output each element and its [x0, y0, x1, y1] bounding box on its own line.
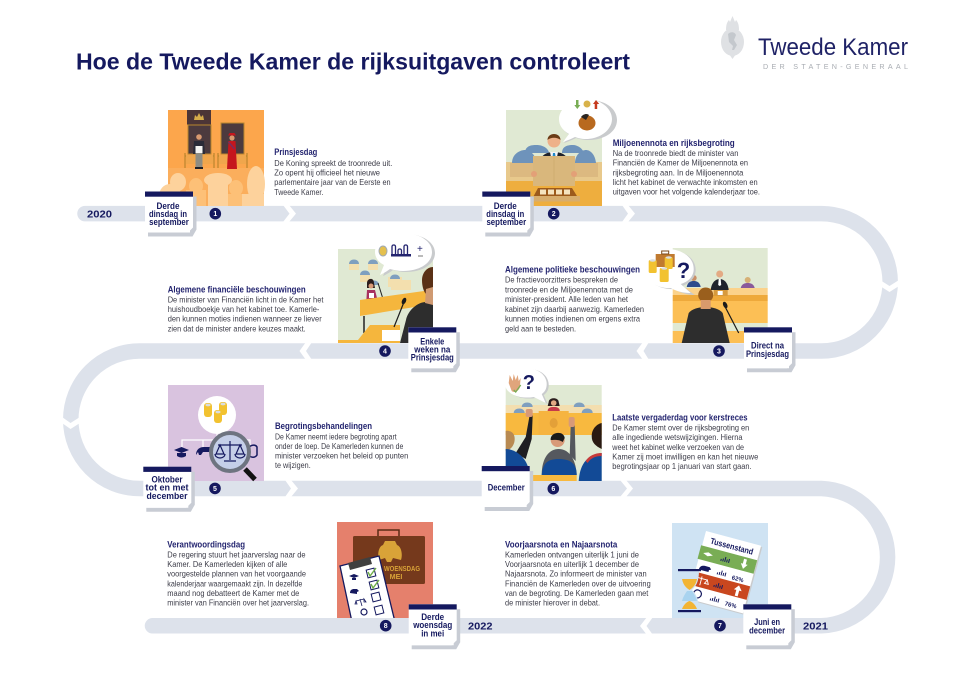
minister-president seen from behind [682, 307, 730, 343]
illustration 4: Algemene financiele beschouwingen [338, 233, 435, 343]
text block 1: De Koning spreekt de troonrede uit. [274, 158, 392, 168]
text block 1: parlementaire jaar van de Eerste en [274, 177, 391, 187]
illustration 5: Begrotingsbehandelingen [168, 385, 264, 481]
step badge 7: 7 [718, 623, 722, 630]
text block 7: van de begroting. De Kamerleden gaan met [505, 588, 649, 598]
speech bubble [559, 99, 617, 143]
king [196, 134, 202, 140]
speech bubble: + [417, 244, 423, 255]
text block 3: geld aan te besteden. [505, 324, 576, 334]
title: Hoe de Tweede Kamer de rijksuitgaven controleert [76, 48, 630, 74]
text block 2 [613, 138, 760, 197]
text block 8: voorgestelde plannen van het voorgaande [167, 569, 306, 579]
text block 1 [274, 147, 392, 197]
step badge 1 [210, 208, 221, 220]
step badge 4: 4 [383, 348, 387, 356]
step badge 3: 3 [717, 348, 721, 356]
text block 3: kabinet zijn daarbij aanwezig. Kamerleden [505, 304, 644, 314]
text block 6: alle ingediende wetswijzigingen. Hierna [612, 432, 743, 442]
date card 3 [744, 327, 796, 372]
icon: jug [249, 445, 257, 457]
text block 2: uitgaven voor het volgende kalenderjaar toe. [613, 187, 760, 197]
date card 2: Derde [494, 201, 517, 211]
text block 6: begrotingsjaar op 1 januari van start gaan. [612, 461, 752, 471]
text block 7: Financiën de Kamerleden over de uitvoering [505, 578, 651, 588]
speech bubble: ? [523, 372, 535, 394]
illustration 8: Verantwoordingsdag: WOENSDAG [384, 564, 420, 573]
step badge 7 [714, 620, 726, 632]
text block 5 [275, 421, 408, 470]
step badge 6: 6 [551, 486, 555, 493]
woman speaker [367, 279, 375, 288]
date card 1 [145, 192, 196, 236]
date card 7: december [749, 626, 786, 636]
date card 1: september [149, 217, 189, 227]
illustration 3: Algemene politieke beschouwingen [644, 248, 768, 343]
text block 2: Na de troonrede biedt de minister van [613, 148, 739, 158]
illustration 8: Verantwoordingsdag [337, 522, 433, 622]
illustration 6: Laatste vergaderdag voor kerstreces [505, 368, 602, 481]
clipboard [340, 556, 395, 622]
briefcase [378, 530, 399, 538]
text block 4: Algemene financiële beschouwingen [168, 284, 306, 294]
illustration 2: Miljoenennota [506, 99, 617, 206]
date card 5 [143, 467, 195, 512]
magnifier [211, 433, 255, 480]
text block 2: Financiën de Kamer de Miljoenennota en [613, 158, 748, 168]
step badge 8: 8 [384, 623, 388, 630]
text block 8 [167, 539, 309, 608]
cabinet members [691, 275, 697, 281]
illustration 7: Voorjaarsnota en Najaarsnota [672, 523, 768, 618]
text block 3: De fractievoorzitters bespreken de [505, 274, 618, 284]
text block 7: de minister hierover in debat. [505, 598, 600, 608]
document: Tussenstand: 62% [731, 575, 745, 584]
text block 3 [505, 265, 644, 334]
step badge 4 [379, 345, 391, 357]
text block 4: De minister van Financiën licht in de Kamer het [168, 294, 324, 304]
icon: cow [196, 447, 215, 455]
text block 7: Voorjaarsnota en Najaarsnota [505, 539, 618, 549]
text block 7 [505, 539, 651, 608]
year 2022: 2022 [468, 620, 493, 632]
lectern ledge [360, 291, 433, 316]
text block 2: rijksbegroting aan. In de Miljoenennota [613, 167, 744, 177]
text block 5: onder de loep. De Kamerleden kunnen de [275, 441, 403, 451]
step badge 3 [713, 345, 725, 357]
text block 1: Zo opent hij officieel het nieuwe [274, 168, 380, 178]
crest panel [187, 110, 211, 124]
step badge 2: 2 [552, 211, 556, 218]
minister [540, 152, 569, 162]
icon: crest [721, 16, 744, 59]
text block 7: Voorjaarsnota en uiterlijk 1 december de [505, 559, 639, 569]
left person [506, 431, 515, 451]
icon: mortar board [174, 447, 189, 458]
date card 5: tot en met [146, 483, 189, 493]
step badge 6 [548, 483, 559, 495]
date card 5: Oktober [152, 475, 183, 485]
text block 6: weet het kabinet welke verzoeken van de [611, 442, 744, 452]
text block 1: Prinsjesdag [274, 147, 317, 157]
middle person [542, 449, 577, 475]
text block 6: Laatste vergaderdag voor kerstreces [612, 412, 748, 422]
microphone [725, 306, 739, 333]
text block 5: Begrotingsbehandelingen [275, 421, 372, 431]
text block 3: troonrede en de Miljoenennota met de [505, 284, 633, 294]
text block 8: De regering stuurt het jaarverslag naar de [167, 549, 306, 559]
date card 4 [408, 327, 460, 372]
thrones [188, 125, 211, 154]
tray [531, 188, 580, 201]
date card 4: Enkele [420, 336, 444, 346]
date card 2: september [486, 217, 527, 227]
step badge 8 [380, 620, 392, 632]
hourglass [678, 569, 701, 612]
text block 3: kunnen moties indienen om ergens extra [505, 314, 640, 324]
logo: Tweede Kamer [721, 16, 908, 71]
date card 8 [409, 604, 460, 649]
text block 8: maand nog debatteert de Kamer met de [167, 588, 299, 598]
date card 2 [482, 192, 534, 236]
step badge 2 [548, 208, 560, 220]
document: Tussenstand: Tussenstand [709, 536, 754, 557]
timeline band [62, 205, 899, 635]
text block 8: Verantwoordingsdag [167, 539, 245, 549]
logo: Tweede Kamer: DER STATEN-GENERAAL [763, 62, 908, 71]
text block 6: Kamer zij moet inwilligen en kan het nieuwe [612, 451, 758, 461]
step badge 1: 1 [213, 211, 217, 218]
document: Tussenstand [680, 529, 763, 615]
foreground man [400, 302, 433, 343]
date card 6: December [488, 482, 525, 492]
illustration 8: Verantwoordingsdag: MEI [390, 572, 402, 581]
text block 7: Najaarsnota. Zo informeert de minister van [505, 569, 647, 579]
date card 1: Derde [156, 201, 180, 211]
speech bubble: ? [677, 258, 690, 283]
text block 4: zien dat de minister andere keuzes maakt. [168, 324, 306, 334]
paper [533, 156, 575, 186]
year 2021: 2021 [803, 620, 828, 632]
text block 4: den kunnen moties indienen wanneer ze liever [168, 314, 322, 324]
desk [539, 411, 569, 435]
date card 3: Direct na [751, 340, 785, 350]
text block 1: Tweede Kamer. [274, 187, 323, 197]
document: Tussenstand: 76% [724, 601, 738, 611]
date card 4: Prinsjesdag [411, 353, 454, 363]
date card 8: woensdag [412, 620, 452, 630]
audience [159, 166, 265, 208]
text block 8: kalenderjaar waargemaakt zijn. In dezelfde [167, 578, 302, 588]
speaker [548, 398, 560, 406]
text block 2: licht het kabinet de verwachte inkomsten en [613, 177, 758, 187]
date card 8: in mei [421, 628, 444, 638]
date card 7 [743, 604, 795, 649]
text block 3: Algemene politieke beschouwingen [505, 265, 640, 275]
text block 2: Miljoenennota en rijksbegroting [613, 138, 735, 148]
date card 3: Prinsjesdag [746, 349, 789, 359]
text block 5: minister verzoeken het beleid op punten [275, 450, 408, 460]
date card 6 [482, 466, 533, 511]
text block 3: minister-president. Alle leden van het [505, 294, 629, 304]
right person [592, 423, 602, 449]
text block 4: huishoudboekje van het kabinet toe. Kamerle- [168, 304, 320, 314]
podium front [338, 325, 400, 343]
step badge 5: 5 [213, 486, 217, 493]
date card 8: Derde [421, 612, 444, 622]
microphone [394, 302, 404, 327]
illustration 1: Prinsjesdag [159, 110, 265, 208]
step badge 5 [209, 483, 221, 494]
text block 8: Kamer. De Kamerleden kijken of alle [167, 559, 287, 569]
text block 5: De Kamer neemt iedere begroting apart [275, 431, 397, 441]
date card 4: weken na [413, 345, 451, 355]
date card 7: Juni en [754, 617, 780, 627]
text block 5: te wijzigen. [275, 460, 311, 470]
text block 7: Kamerleden ontvangen uiterlijk 1 juni de [505, 549, 639, 559]
date card 5: december [147, 491, 188, 501]
text block 8: minister van Financiën over het jaarverslag. [167, 598, 309, 608]
text block 6 [611, 412, 758, 471]
logo: Tweede Kamer: Tweede Kamer [758, 34, 908, 61]
date card 2: dinsdag in [486, 209, 524, 219]
queen [229, 135, 235, 141]
date card 1: dinsdag in [149, 209, 187, 219]
text block 4 [168, 284, 324, 334]
text block 6: De Kamer stemt over de rijksbegroting en [612, 423, 749, 433]
year 2020: 2020 [87, 209, 112, 221]
